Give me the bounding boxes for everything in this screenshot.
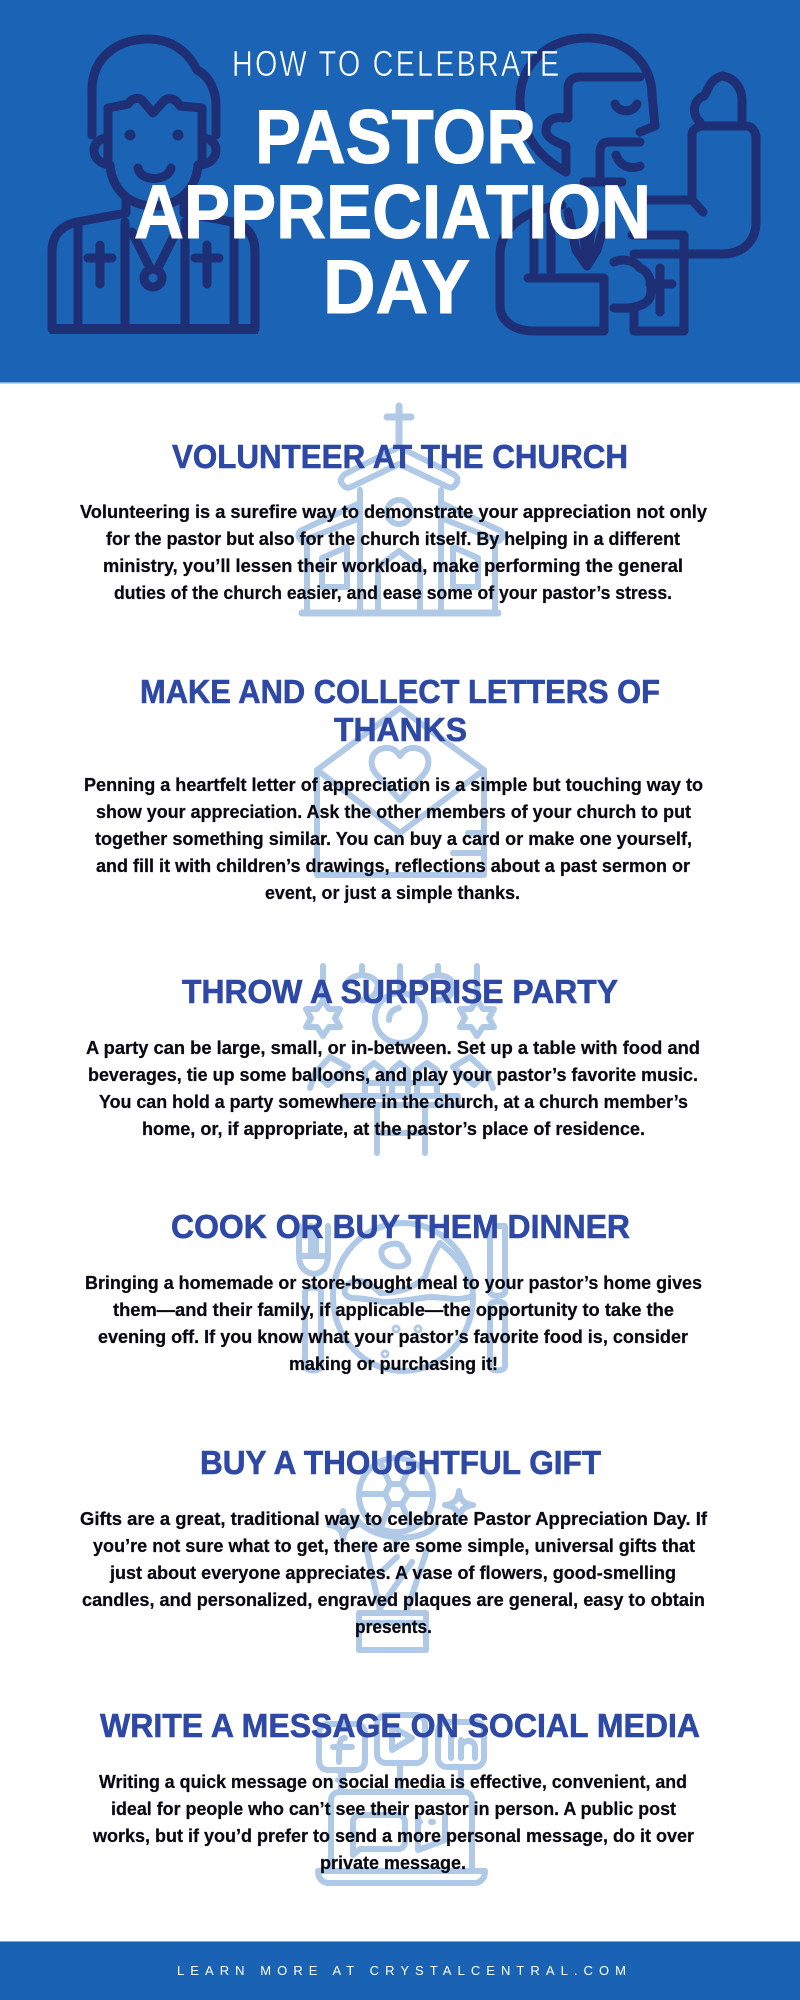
body text: Bringing a homemade or store-bought meal to your pastor’s home gives: [85, 1272, 702, 1293]
body text: ministry, you’ll lessen their workload, make performing the general: [103, 555, 683, 576]
icon: laptop with social media tiles: [318, 1715, 485, 1883]
header banner: [0, 0, 800, 384]
body text: [80, 501, 708, 603]
body text: A party can be large, small, or in-between. Set up a table with food and: [86, 1037, 700, 1058]
body text: show your appreciation. Ask the other members of your church to put: [96, 801, 691, 822]
heading: THROW A SURPRISE PARTY: [182, 973, 618, 1010]
footer: [0, 1941, 800, 2000]
heading: VOLUNTEER AT THE CHURCH: [172, 438, 628, 475]
icon: smiling pastor: [50, 39, 258, 329]
body text: for the pastor but also for the church itself. By helping in a different: [106, 528, 680, 549]
body text: ideal for people who can’t see their pastor in person. A public post: [111, 1798, 676, 1819]
icon: envelope with heart: [317, 708, 484, 875]
title: APPRECIATION: [134, 170, 651, 255]
icon: party table, balloon and stars: [306, 966, 494, 1153]
body text: Gifts are a great, traditional way to celebrate Pastor Appreciation Day. If: [80, 1508, 708, 1529]
title: DAY: [323, 245, 470, 330]
body text: candles, and personalized, engraved plaques are general, easy to obtain: [82, 1589, 705, 1610]
body text: presents.: [355, 1616, 432, 1637]
body text: just about everyone appreciates. A vase of flowers, good-smelling: [109, 1562, 676, 1583]
icon: church: [298, 406, 503, 613]
body text: [92, 1771, 694, 1873]
heading: WRITE A MESSAGE ON SOCIAL MEDIA: [100, 1707, 700, 1744]
heading: COOK OR BUY THEM DINNER: [171, 1208, 630, 1245]
panel: throw a surprise party: [86, 966, 700, 1153]
body text: [80, 1508, 708, 1637]
body text: home, or, if appropriate, at the pastor’s place of residence.: [142, 1118, 645, 1139]
body text: making or purchasing it!: [289, 1353, 498, 1374]
body text: beverages, tie up some balloons, and play your pastor’s favorite music.: [88, 1064, 698, 1085]
body text: Volunteering is a surefire way to demonstrate your appreciation not only: [80, 501, 708, 522]
body text: you’re not sure what to get, there are some simple, universal gifts that: [93, 1535, 695, 1556]
body text: event, or just a simple thanks.: [265, 882, 520, 903]
heading: BUY A THOUGHTFUL GIFT: [200, 1444, 601, 1481]
title: PASTOR: [255, 95, 536, 180]
body text: them—and their family, if applicable—the opportunity to take the: [113, 1299, 674, 1320]
body text: Penning a heartfelt letter of appreciation is a simple but touching way to: [84, 774, 703, 795]
panel: make and collect letters of thanks: [84, 673, 703, 903]
body text: together something similar. You can buy a card or make one yourself,: [95, 828, 692, 849]
body text: Writing a quick message on social media is effective, convenient, and: [99, 1771, 687, 1792]
panel: write a message on social media: [92, 1707, 700, 1883]
panel: cook or buy them dinner: [85, 1208, 702, 1374]
body text: evening off. If you know what your pastor’s favorite food is, consider: [98, 1326, 688, 1347]
body text: [84, 774, 703, 903]
panel: volunteer at the church: [80, 406, 708, 613]
body text: [85, 1272, 702, 1374]
heading: MAKE AND COLLECT LETTERS OF: [140, 673, 660, 710]
title: [134, 95, 651, 330]
subtitle: HOW TO CELEBRATE: [232, 43, 559, 84]
body text: private message.: [320, 1852, 466, 1873]
body text: [86, 1037, 700, 1139]
panel: buy a thoughtful gift: [80, 1444, 708, 1650]
heading: THANKS: [334, 711, 467, 748]
body text: and fill it with children’s drawings, reflections about a past sermon or: [96, 855, 690, 876]
heading: [140, 673, 660, 748]
body text: works, but if you’d prefer to send a more personal message, do it over: [92, 1825, 694, 1846]
icon: pastor raising a hand with bible: [500, 38, 756, 331]
footer: LEARN MORE AT CRYSTALCENTRAL.COM: [177, 1963, 626, 1978]
body text: You can hold a party somewhere in the church, at a church member’s: [99, 1091, 688, 1112]
icon: plate, fork, knife and chicken: [299, 1223, 505, 1371]
icon: trophy with ball and sparkles: [329, 1458, 473, 1650]
body text: duties of the church easier, and ease some of your pastor’s stress.: [114, 582, 672, 603]
